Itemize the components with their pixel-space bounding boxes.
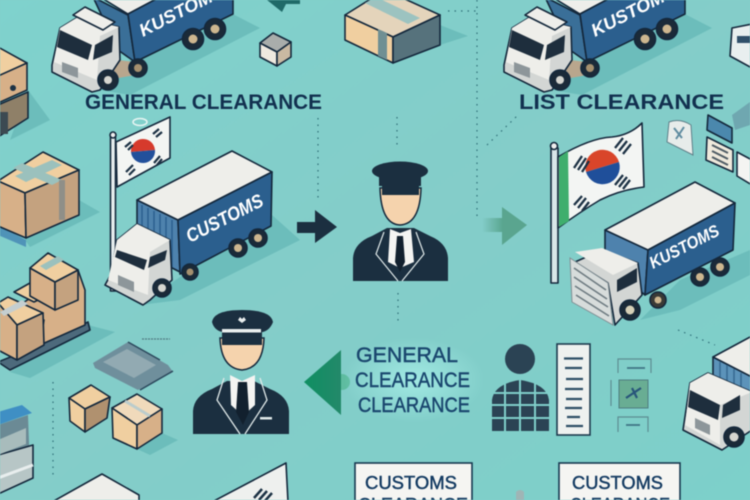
arrow: dark right [297,210,337,243]
icon: document bottom [212,463,288,500]
arrow: green left [304,350,350,415]
officer: lower left [193,310,289,434]
icon: crate bottom left [52,474,139,500]
text block: general clearance clearance [344,338,484,422]
icon: machine bottom left [0,405,33,494]
heading: list clearance: LIST CLEARANCE [519,91,724,114]
icon: small stamp card [667,121,693,155]
sign: customs clearance right [559,463,680,500]
truck: top left [52,0,260,95]
text block: general clearance clearance: GENERAL [356,344,458,367]
truck: bottom right [683,336,750,450]
icon: box stack on pallet [0,253,115,378]
icon: open document [93,339,173,390]
icon: box stack top left [0,47,50,140]
icon: taped box left [0,152,100,247]
icon: customs form [611,359,651,432]
icon: person with grid [492,344,549,431]
icon: large box top centre [345,0,468,63]
icon: small box top [260,33,291,66]
flag: korea right [550,123,644,283]
icon: two small boxes [69,385,178,455]
icon: checklist document [557,344,590,435]
arrow: faded green right [482,207,527,245]
sign: customs clearance left: CUSTOMS [365,473,457,493]
icon: small figure bottom [516,490,524,500]
truck: centre left customs [105,151,300,305]
truck: centre left customs: CUSTOMS [183,190,267,247]
heading: general clearance: GENERAL CLEARANCE [85,91,322,114]
truck: top right [504,0,712,95]
sign: customs clearance right: CUSTOMS [572,473,663,493]
truck: right with document: KUSTOMS [646,221,723,273]
text block: general clearance clearance: CLEARANCE [358,394,470,417]
icon: sign top right [730,24,750,68]
icon: document building right [706,102,750,185]
icon: arrow top [267,0,300,12]
officer: centre [353,162,448,281]
text block: general clearance clearance: CLEARANCE [355,369,470,392]
sign: customs clearance left [355,463,472,500]
flag: korea left [110,117,170,291]
truck: right with document [570,182,750,325]
